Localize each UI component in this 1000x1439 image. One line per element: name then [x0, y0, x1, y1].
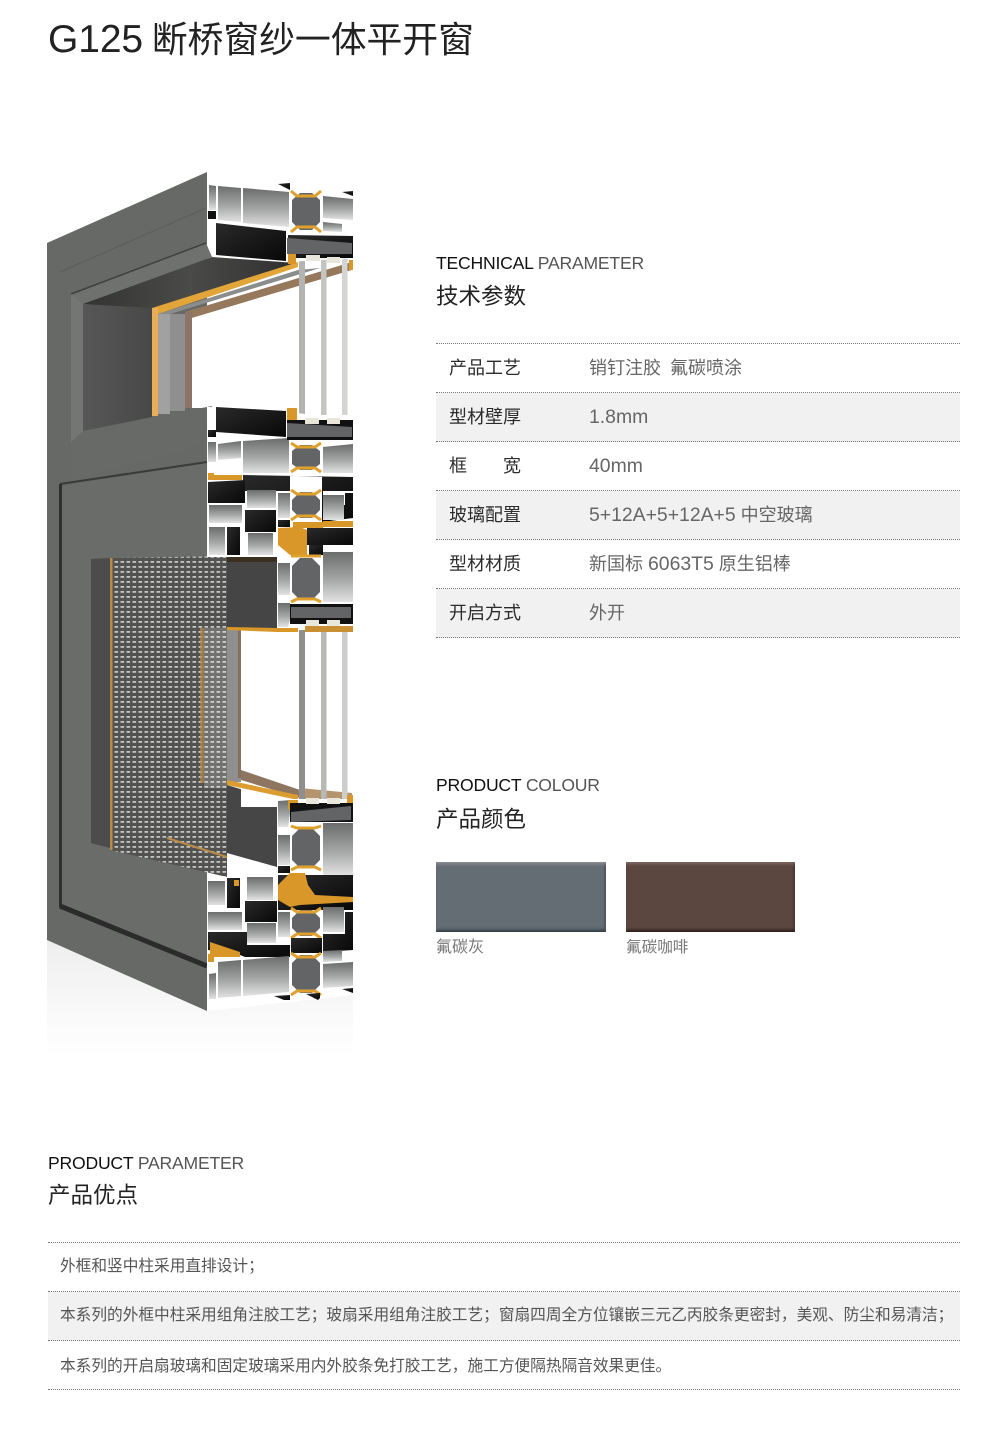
- row: wall thickness: 1.8mm: [589, 406, 648, 428]
- top profile section: [207, 182, 353, 270]
- sash face and groove: [59, 462, 207, 967]
- heading: product parameter: PRODUCT PARAMETER: [48, 1153, 244, 1173]
- advantage 1: [48, 1243, 960, 1292]
- row: glass configuration: 玻璃配置: [449, 505, 521, 525]
- row: profile material: 型材材质: [449, 554, 521, 574]
- swatch: fluorocarbon coffee: [626, 862, 795, 956]
- heading: product parameter: [48, 1153, 244, 1208]
- lower profile section: [207, 795, 353, 1001]
- aluminium front face: [47, 172, 207, 1011]
- advantage 2: [48, 1292, 960, 1341]
- row: process: 产品工艺: [449, 358, 521, 378]
- glass panes: [227, 255, 353, 807]
- row: wall thickness: 型材壁厚: [449, 407, 521, 427]
- advantage 3: [48, 1341, 960, 1390]
- advantage 1: 外框和竖中柱采用直排设计；: [60, 1258, 264, 1275]
- list: product advantages: [48, 1242, 960, 1391]
- row: opening method: 开启方式: [449, 603, 521, 623]
- swatch: fluorocarbon coffee: 氟碳咖啡: [626, 939, 688, 956]
- heading: product colour: PRODUCT COLOUR: [436, 775, 600, 795]
- row: wall thickness: [436, 393, 960, 442]
- table: technical parameters: [436, 343, 960, 639]
- heading: technical parameter: [436, 253, 644, 309]
- swatch: fluorocarbon grey: [436, 862, 606, 956]
- row: process: 销钉注胶 氟碳喷涂: [589, 358, 742, 378]
- row: process: [436, 344, 960, 393]
- window section cutaway illustration: [47, 172, 353, 1011]
- heading: product colour: [436, 775, 600, 832]
- insect screen opening: [91, 556, 300, 877]
- row: opening method: 外开: [589, 603, 625, 623]
- row: profile material: 新国标 6063T5 原生铝棒: [589, 553, 791, 575]
- heading: technical parameter: TECHNICAL PARAMETER: [436, 253, 644, 273]
- heading: product colour: 产品颜色: [436, 807, 526, 832]
- row: frame width: 40mm: [589, 455, 643, 477]
- row: glass configuration: [436, 491, 960, 540]
- upper window opening: [71, 243, 352, 480]
- swatch: fluorocarbon grey: 氟碳灰: [436, 939, 484, 956]
- heading: technical parameter: 技术参数: [436, 284, 526, 309]
- title: G125 断桥窗纱一体平开窗: [48, 18, 474, 61]
- advantage 2: 本系列的外框中柱采用组角注胶工艺；玻扇采用组角注胶工艺；窗扇四周全方位镶嵌三元乙丙胶条更密封，美观、防尘和易清洁；: [60, 1307, 953, 1324]
- row: frame width: [436, 442, 960, 491]
- row: profile material: [436, 540, 960, 589]
- heading: product parameter: 产品优点: [48, 1183, 138, 1208]
- advantage 3: 本系列的开启扇玻璃和固定玻璃采用内外胶条免打胶工艺，施工方便隔热隔音效果更佳。: [60, 1358, 671, 1375]
- row: opening method: [436, 589, 960, 638]
- row: frame width: 框 宽: [449, 456, 521, 476]
- middle profile section: [207, 407, 353, 632]
- floor reflection: [47, 940, 353, 1055]
- row: glass configuration: 5+12A+5+12A+5 中空玻璃: [589, 504, 813, 526]
